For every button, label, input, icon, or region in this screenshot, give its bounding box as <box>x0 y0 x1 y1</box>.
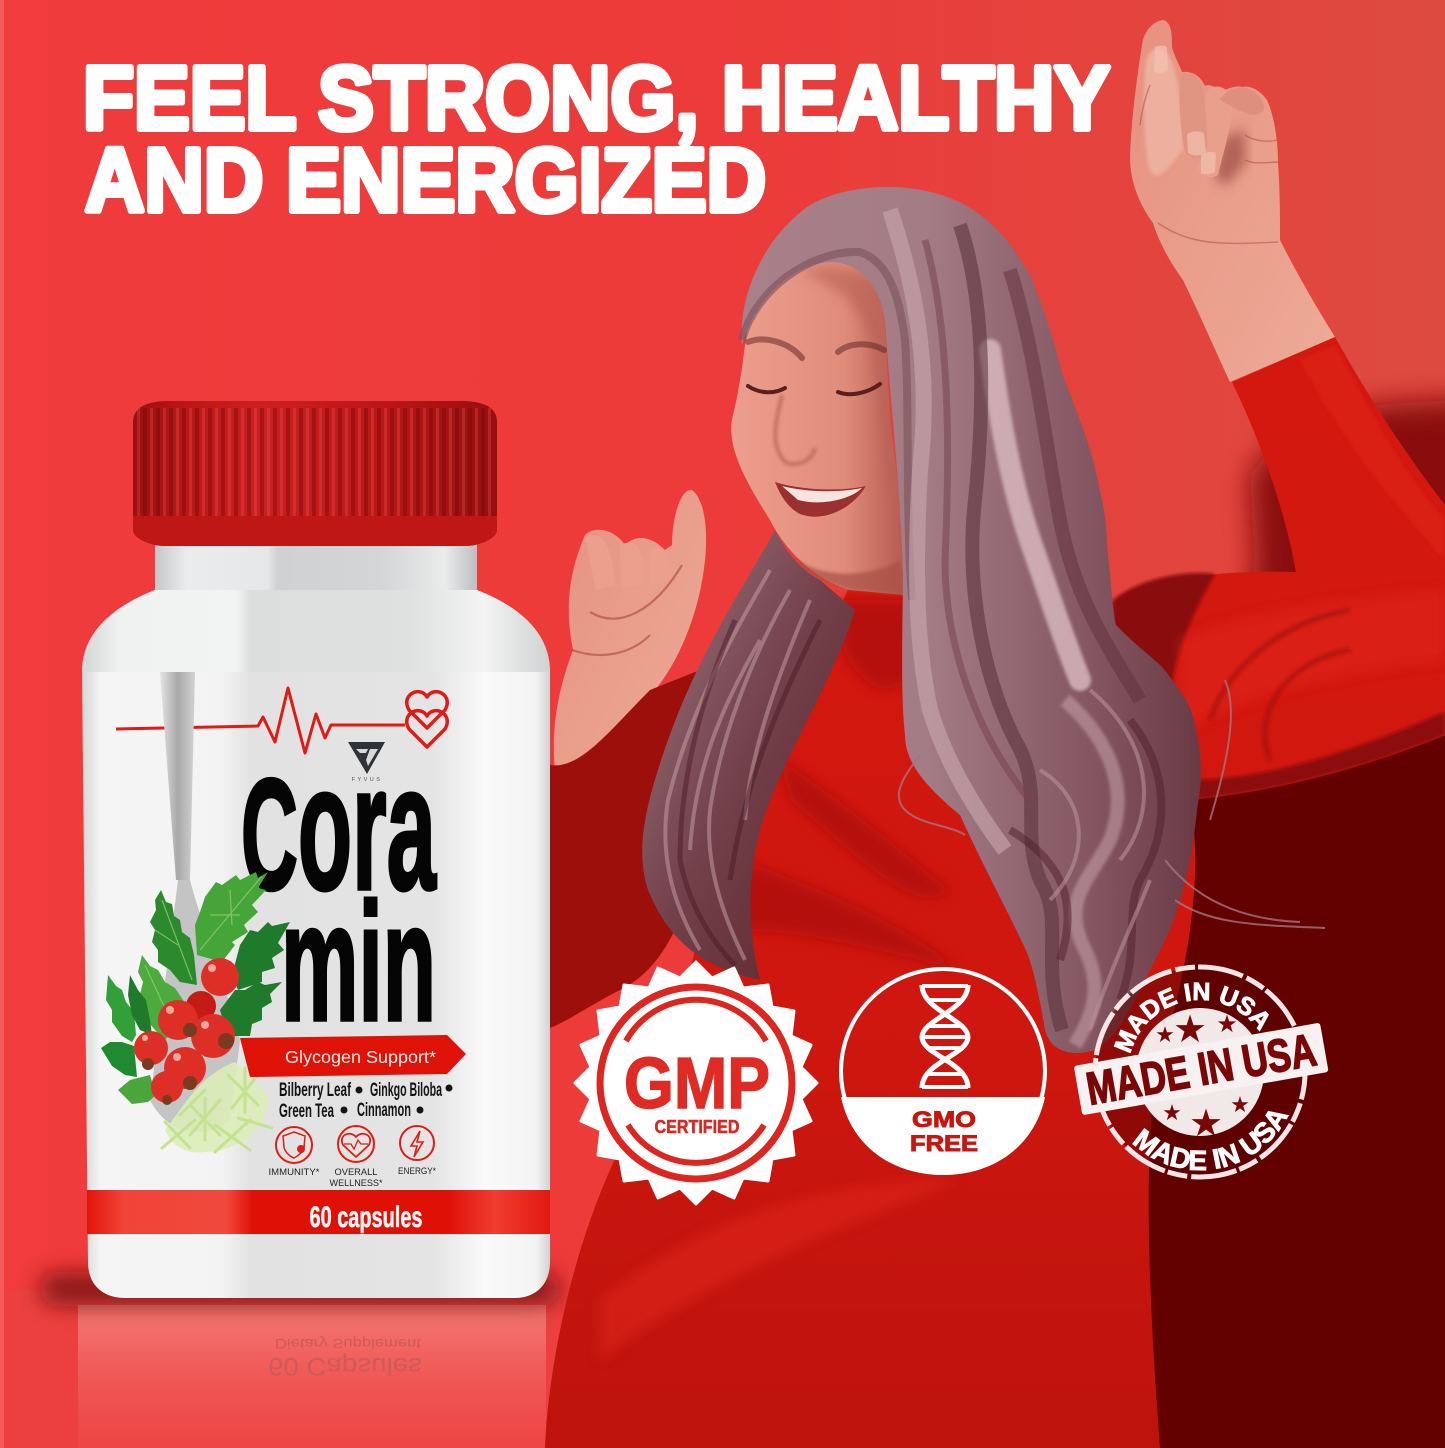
stars: ★ <box>1189 1103 1223 1145</box>
ingredient list: Cinnamon <box>357 1100 411 1121</box>
main hair <box>742 187 1325 1053</box>
badge: GMO free: FREE <box>910 1131 978 1156</box>
title <box>83 49 1110 231</box>
badge: GMO free <box>841 969 1045 1175</box>
stars: ★ <box>1216 1011 1238 1038</box>
badge: GMO free: GMO <box>912 1107 976 1132</box>
stars: ★ <box>1155 1022 1175 1047</box>
benefit: immunity <box>268 1127 320 1177</box>
ribbon <box>1074 1022 1329 1116</box>
woman <box>545 20 1445 1448</box>
benefit: energy <box>398 1126 436 1176</box>
benefit: immunity: IMMUNITY* <box>268 1167 320 1177</box>
bottle cap <box>133 401 497 546</box>
floor reflection: 60 Capsules <box>268 1352 422 1380</box>
badge: GMP certified: CERTIFIED <box>654 1117 740 1137</box>
spoon <box>160 672 195 880</box>
bottle shoulder <box>82 590 550 672</box>
benefit: overall wellness <box>330 1126 383 1188</box>
flowers <box>165 1062 268 1153</box>
left hair <box>642 530 855 980</box>
bottle body <box>82 590 550 1298</box>
benefit: overall wellness: OVERALL <box>334 1167 378 1177</box>
badge: made in USA stamp <box>1074 964 1328 1180</box>
product name <box>241 728 437 1056</box>
ingredient list: Bilberry Leaf <box>279 1080 351 1101</box>
title: FEEL STRONG, HEALTHY <box>83 49 1110 149</box>
eyes and brows <box>748 339 884 394</box>
capsule count: 60 capsules <box>310 1201 422 1234</box>
botanical illustration <box>101 872 290 1153</box>
product name: Cora <box>241 728 437 927</box>
ribbon: MADE IN USA <box>1082 1023 1320 1115</box>
glycogen banner: Glycogen Support* <box>285 1047 436 1067</box>
ingredient list: Ginkgo Biloba <box>370 1080 442 1101</box>
DNA helix <box>922 985 968 1088</box>
brand logo <box>348 742 385 783</box>
ingredient list: Green Tea <box>279 1101 334 1122</box>
badge: made in USA stamp: MADE IN USA <box>1132 1110 1289 1171</box>
product bottle <box>82 401 550 1298</box>
ingredient list <box>279 1080 452 1122</box>
badge: GMP certified: GMP <box>624 1044 770 1124</box>
stars: ★ <box>1230 1092 1250 1117</box>
nose and cheek <box>775 395 815 464</box>
raised hand <box>1130 20 1335 382</box>
stars: ★ <box>1162 1100 1182 1125</box>
badge: made in USA stamp: MADE IN USA <box>1114 982 1269 1054</box>
smile <box>775 482 866 517</box>
glycogen banner <box>240 1035 466 1077</box>
face <box>731 230 905 595</box>
bottle neck <box>155 535 477 595</box>
floor reflection: Dietary Supplement <box>275 1336 421 1352</box>
title: AND ENERGIZED <box>85 131 766 231</box>
floor reflection <box>0 0 560 1448</box>
sweater <box>545 337 1445 1448</box>
badge: GMP certified <box>575 962 817 1204</box>
left hand <box>554 490 706 782</box>
berries <box>134 958 239 1103</box>
red band <box>87 1190 550 1234</box>
product name: min <box>281 868 436 1056</box>
heartbeat line <box>116 688 447 753</box>
benefit: energy: ENERGY* <box>398 1166 436 1176</box>
stars: ★ <box>1173 1009 1207 1051</box>
brand logo: FYVUS <box>352 777 382 783</box>
benefit: overall wellness: WELLNESS* <box>330 1178 383 1188</box>
stars <box>1155 1009 1250 1145</box>
